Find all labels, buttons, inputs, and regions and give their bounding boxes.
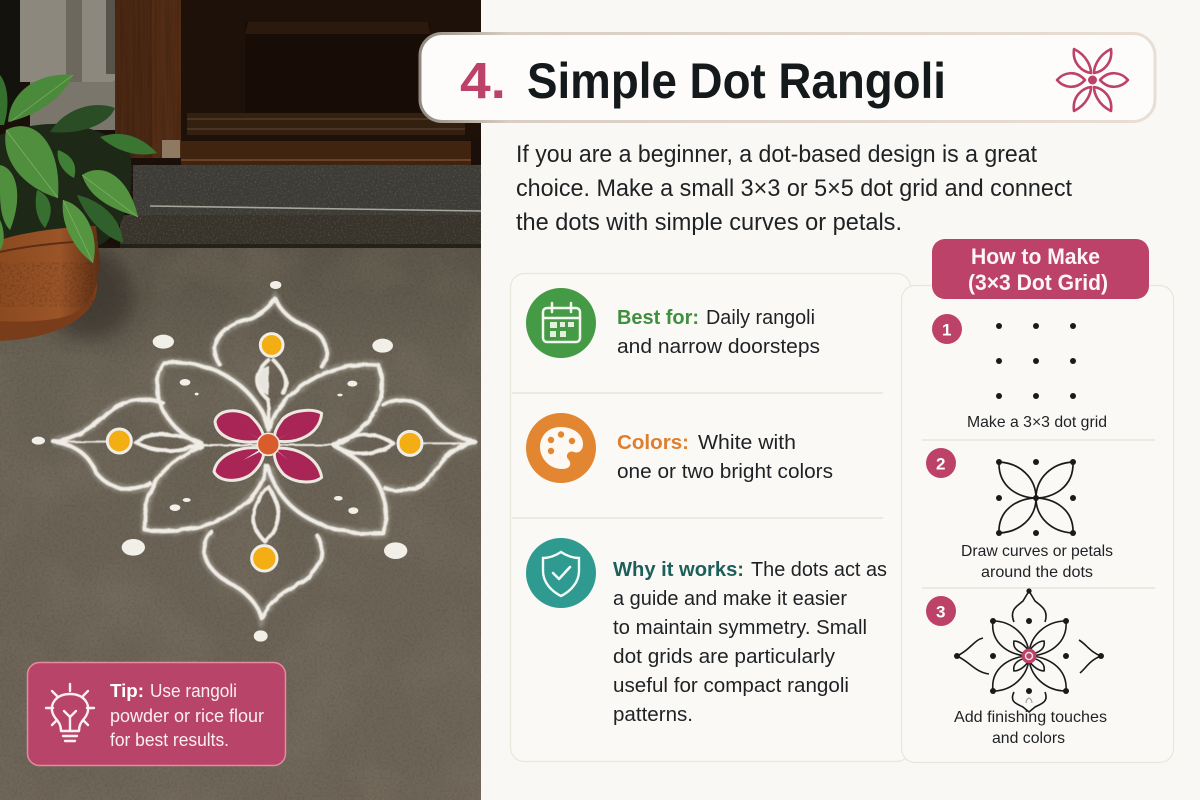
intro paragraph: the dots with simple curves or petals. xyxy=(516,209,902,236)
step 3: Add finishing touches xyxy=(954,709,1107,726)
row: best for xyxy=(526,288,820,358)
intro paragraph xyxy=(516,141,1072,236)
doorway wall and door xyxy=(0,0,481,250)
step 3: and colors xyxy=(992,730,1065,747)
row: why it works: a guide and make it easier xyxy=(613,588,847,610)
step 1: 1 xyxy=(942,320,951,340)
step 3: 3 xyxy=(936,602,945,622)
row: best for: Best for: xyxy=(617,307,699,329)
concrete floor xyxy=(0,248,481,800)
badge: how to make: (3×3 Dot Grid) xyxy=(968,270,1108,295)
intro paragraph: choice. Make a small 3×3 or 5×5 dot grid and connect xyxy=(516,175,1072,202)
row: why it works xyxy=(526,538,887,726)
badge: how to make: How to Make xyxy=(971,244,1100,269)
icon: light bulb xyxy=(46,684,94,741)
row: best for: and narrow doorsteps xyxy=(617,336,820,358)
step 2: 2 xyxy=(936,454,945,474)
icon: shield xyxy=(526,538,596,608)
row: why it works: Why it works: xyxy=(613,559,744,581)
tip text: powder or rice flour xyxy=(110,706,264,726)
pot saucer xyxy=(0,282,97,341)
row: colors: one or two bright colors xyxy=(617,461,833,483)
row: why it works: dot grids are particularly xyxy=(613,646,835,668)
white dots xyxy=(32,281,407,642)
petal drawing xyxy=(996,459,1076,536)
tip text: Tip: xyxy=(110,681,144,701)
stone step xyxy=(120,165,481,249)
tip callout xyxy=(28,662,286,766)
step 1 xyxy=(932,314,1107,431)
photo: doorstep with rangoli xyxy=(0,0,481,800)
icon: calendar xyxy=(526,288,596,358)
title: Simple Dot Rangoli xyxy=(527,53,946,109)
panel: key facts xyxy=(510,274,910,762)
step 1: Make a 3×3 dot grid xyxy=(967,414,1107,431)
yellow dots xyxy=(107,334,422,571)
magenta centre flower xyxy=(214,410,322,482)
tip text xyxy=(110,681,264,750)
potted plant xyxy=(0,75,157,341)
badge: how to make xyxy=(932,239,1149,299)
icon: palette xyxy=(526,413,596,483)
row: colors xyxy=(526,413,833,483)
dot grid xyxy=(996,323,1076,399)
intro paragraph: If you are a beginner, a dot-based design is a great xyxy=(516,141,1037,168)
step 3 xyxy=(926,588,1107,747)
row: why it works: The dots act as xyxy=(751,559,887,581)
powder halo xyxy=(53,298,475,618)
row: why it works: to maintain symmetry. Small xyxy=(613,617,867,639)
centre dot xyxy=(257,433,279,455)
row: best for: Daily rangoli xyxy=(706,307,815,329)
leaves xyxy=(50,105,115,133)
step 2: Draw curves or petals xyxy=(961,543,1113,560)
step 2: around the dots xyxy=(981,564,1093,581)
tip text: for best results. xyxy=(110,730,229,750)
row: why it works: useful for compact rangoli xyxy=(613,675,849,697)
title banner xyxy=(420,34,1155,122)
step 2 xyxy=(926,448,1113,581)
tip text: Use rangoli xyxy=(150,681,237,701)
row: why it works: patterns. xyxy=(613,704,693,726)
centre star highlights xyxy=(243,431,293,460)
pot xyxy=(0,226,100,322)
row: colors: Colors: xyxy=(617,432,689,454)
white line work xyxy=(53,298,475,618)
row: colors: White with xyxy=(698,432,796,454)
icon: flower xyxy=(1057,49,1128,111)
finished rangoli drawing xyxy=(954,588,1104,712)
section number: 4. xyxy=(460,52,506,109)
panel: how to make xyxy=(902,239,1174,762)
rangoli on floor xyxy=(32,281,475,642)
